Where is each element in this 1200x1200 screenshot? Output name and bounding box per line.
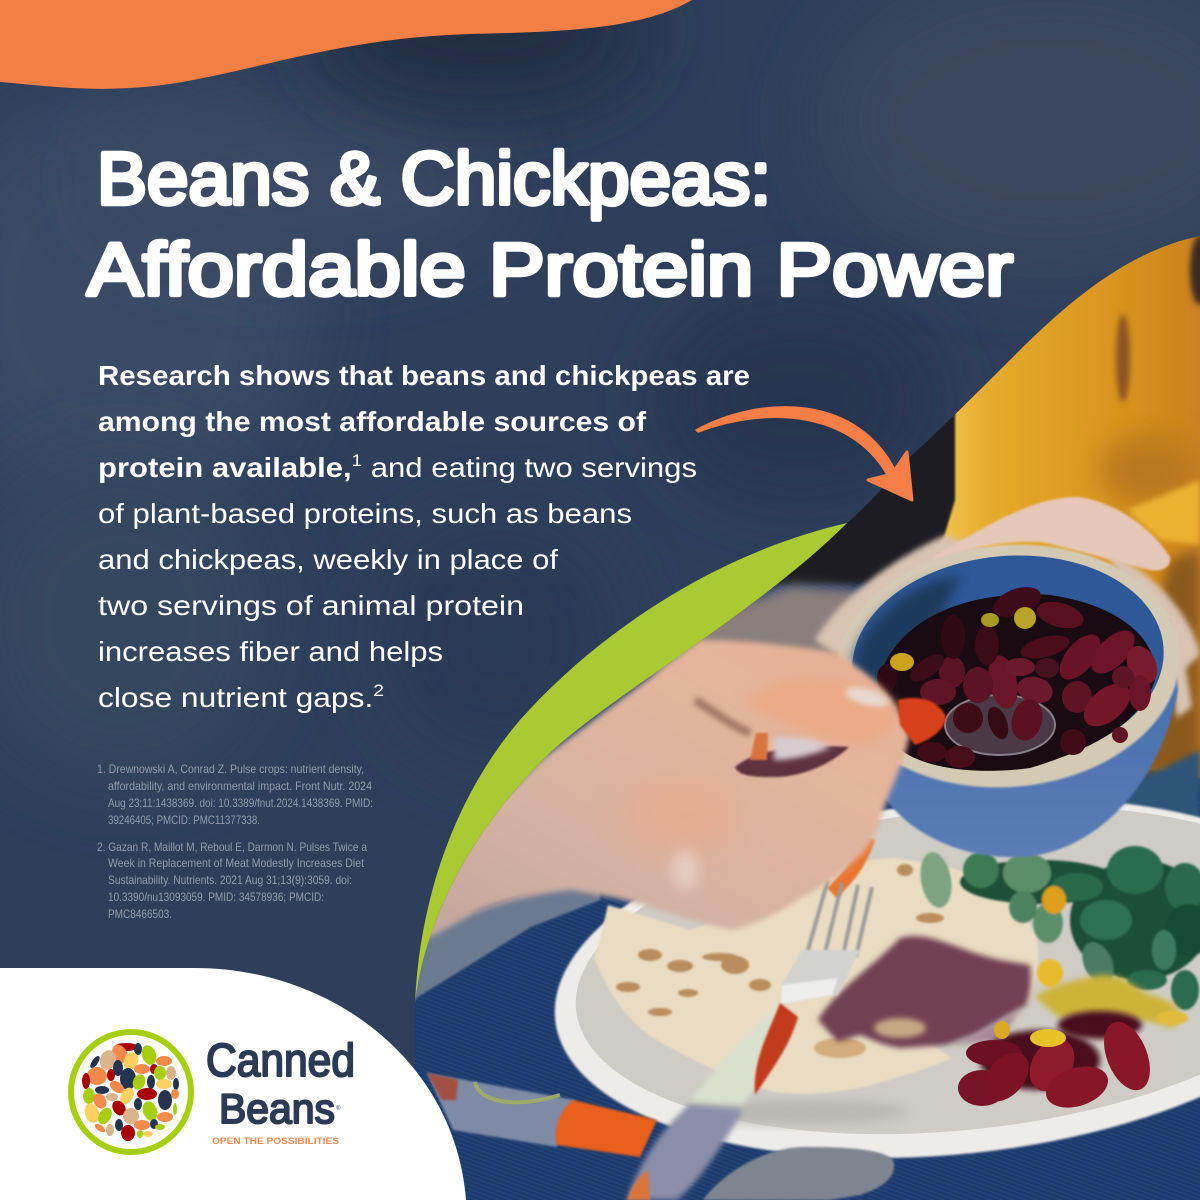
finger over bowl rim: [933, 497, 1170, 570]
green leaf swoosh: [415, 523, 847, 1003]
fork and knife: [627, 880, 872, 1200]
intro paragraph: two servings of animal protein: [98, 590, 524, 621]
intro paragraph: [98, 360, 750, 713]
logo ring with beans: [71, 1032, 191, 1152]
spoon: [945, 695, 1055, 755]
hands behind bowl: [815, 535, 1200, 718]
intro paragraph: increases fiber and helps: [98, 636, 443, 667]
intro paragraph: and chickpeas, weekly in place of: [98, 544, 558, 575]
title: Affordable Protein Power: [87, 228, 1013, 311]
fork head and tines: [781, 880, 872, 1004]
tortilla: [594, 858, 1038, 1094]
references: Week in Replacement of Meat Modestly Increases Diet: [108, 856, 365, 870]
wordmark: OPEN THE POSSIBILITIES: [212, 1136, 339, 1147]
intro paragraph: Research shows that beans and chickpeas are: [98, 360, 750, 391]
intro paragraph: 2: [373, 681, 384, 700]
arrow pointing to the bowl: [696, 407, 912, 500]
references: 1. Drewnowski A, Conrad Z. Pulse crops: nutrient density,: [97, 762, 364, 776]
references: Sustainability. Nutrients. 2021 Aug 31;13(9):3059. doi:: [108, 873, 352, 887]
intro paragraph: among the most affordable sources of: [98, 406, 647, 437]
intro paragraph: close nutrient gaps.: [98, 682, 341, 713]
beans inside bowl: [877, 581, 1163, 768]
wordmark: Beans: [219, 1085, 335, 1132]
wordmark: [206, 1034, 355, 1147]
logo: [71, 1032, 355, 1152]
references: 39246405; PMCID: PMC11377338.: [108, 813, 260, 827]
references: 10.3390/nu13093059. PMID: 34578936; PMCID:: [108, 890, 324, 904]
intro paragraph: 1: [352, 451, 362, 470]
top orange wave: [0, 0, 692, 89]
corn in bowl: [890, 607, 1036, 671]
hand holding the spoon: [400, 640, 946, 950]
knife handle and glass bowl: [427, 1073, 894, 1200]
references: Aug 23;11:1438369. doi: 10.3389/fnut.2024.1438369. PMID:: [108, 796, 373, 810]
title: [87, 137, 1013, 311]
title: Beans & Chickpeas:: [97, 137, 771, 220]
photo background: dark backdrop and yellow sweater: [415, 200, 1200, 1000]
references: PMC8466503.: [108, 907, 172, 921]
wordmark: Canned: [206, 1034, 355, 1086]
blue ceramic bowl: [826, 530, 1190, 857]
fork handle: [627, 1003, 798, 1200]
white logo panel: [0, 968, 466, 1200]
glass band under forearm: [416, 886, 602, 1000]
kidney beans on plate: [958, 1011, 1159, 1115]
wordmark: ®: [336, 1105, 341, 1112]
plate: [553, 802, 1200, 1160]
intro paragraph: protein available,: [98, 452, 352, 483]
references: [97, 762, 373, 921]
salad greens and corn: [832, 838, 1200, 1028]
intro paragraph: and eating two servings: [362, 452, 697, 483]
references: affordability, and environmental impact. Front Nutr. 2024: [108, 779, 372, 793]
references: 2. Gazan R, Maillot M, Reboul E, Darmon N. Pulses Twice a: [97, 840, 367, 854]
photo: meal with bowl of kidney beans: [400, 200, 1200, 1200]
intro paragraph: of plant-based proteins, such as beans: [98, 498, 632, 529]
